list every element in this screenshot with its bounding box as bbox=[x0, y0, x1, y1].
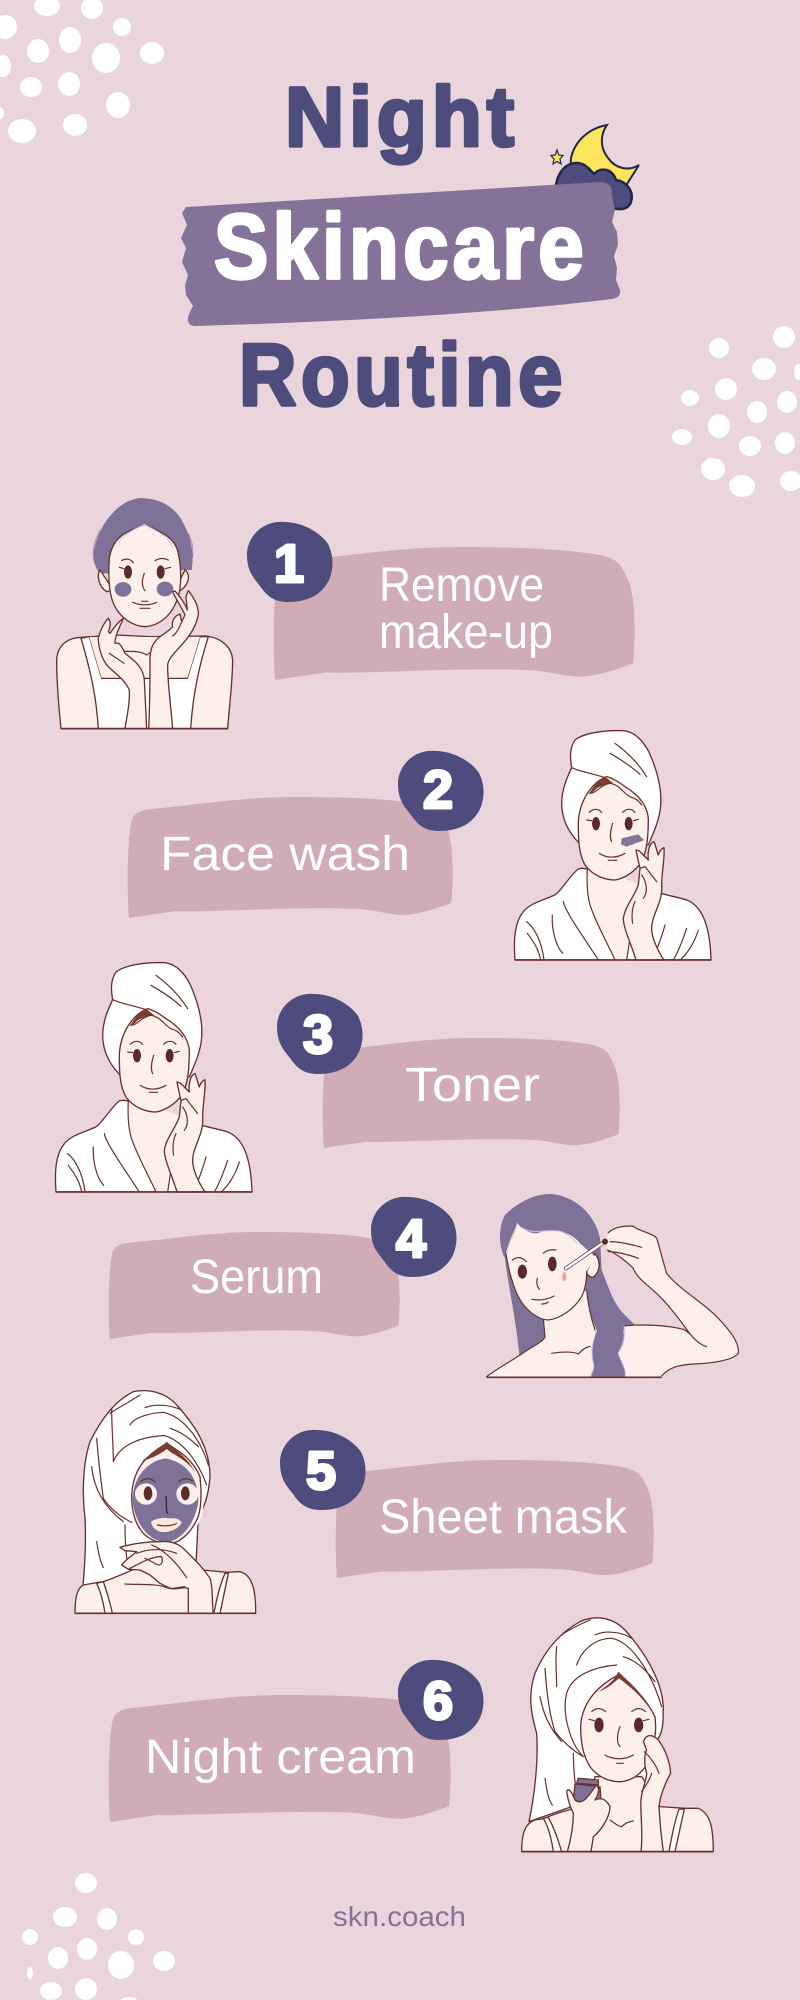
panel: step 1 remove make-up bbox=[57, 498, 635, 729]
illustration: woman in towel and robe bbox=[55, 963, 252, 1192]
title word: Skincare: Skincare bbox=[214, 196, 588, 298]
panel: step 6 night cream bbox=[109, 1618, 713, 1852]
badge: 1: 1 bbox=[274, 534, 304, 594]
illustration: woman wearing sheet mask bbox=[75, 1391, 256, 1613]
banner bbox=[336, 1460, 654, 1578]
badge: 3: 3 bbox=[303, 1005, 333, 1065]
title word: Routine: Routine bbox=[239, 325, 567, 424]
panel: step 3 toner bbox=[55, 963, 620, 1192]
badge: 2 bbox=[398, 751, 484, 831]
label: Face wash bbox=[160, 828, 410, 881]
panel: step 5 sheet mask bbox=[75, 1391, 654, 1613]
banner bbox=[128, 797, 453, 918]
decoration: right white dots bbox=[672, 326, 800, 497]
decoration: bottom-left white dots bbox=[22, 1873, 175, 2000]
decoration: top-left white dots bbox=[0, 0, 164, 143]
icon: moon, star and cloud bbox=[551, 125, 639, 209]
banner bbox=[323, 1038, 620, 1148]
label bbox=[379, 559, 553, 659]
ribbon: Skincare backing bbox=[181, 182, 620, 326]
label: Sheet mask bbox=[379, 1491, 628, 1544]
badge: 6: 6 bbox=[423, 1671, 453, 1731]
badge: 2: 2 bbox=[423, 760, 453, 820]
panel: step 4 serum bbox=[109, 1194, 738, 1377]
title word: Night: Night bbox=[285, 70, 519, 164]
panel: step 2 face wash bbox=[128, 731, 711, 960]
footer: brand: skn.coach bbox=[333, 1901, 466, 1932]
label: Night cream bbox=[145, 1731, 416, 1784]
badge: 5 bbox=[280, 1430, 366, 1510]
badge: 1 bbox=[247, 522, 332, 602]
badge: 4 bbox=[371, 1197, 456, 1277]
badge: 6 bbox=[398, 1660, 484, 1740]
badge: 5: 5 bbox=[306, 1441, 336, 1501]
badge: 3 bbox=[277, 994, 362, 1074]
illustration: woman with cotton pads bbox=[57, 498, 233, 729]
label: Serum bbox=[190, 1251, 323, 1304]
illustration: woman applying serum with dropper bbox=[487, 1194, 738, 1377]
title bbox=[181, 70, 620, 424]
illustration: woman in towel and robe with cleanser bbox=[514, 731, 711, 960]
banner bbox=[109, 1232, 400, 1339]
label: make-up bbox=[379, 606, 553, 659]
banner bbox=[109, 1695, 451, 1822]
illustration: woman applying night cream bbox=[522, 1618, 713, 1852]
label: Remove bbox=[379, 559, 544, 612]
badge: 4: 4 bbox=[396, 1209, 426, 1269]
label: Toner bbox=[405, 1059, 540, 1112]
banner bbox=[274, 547, 635, 680]
